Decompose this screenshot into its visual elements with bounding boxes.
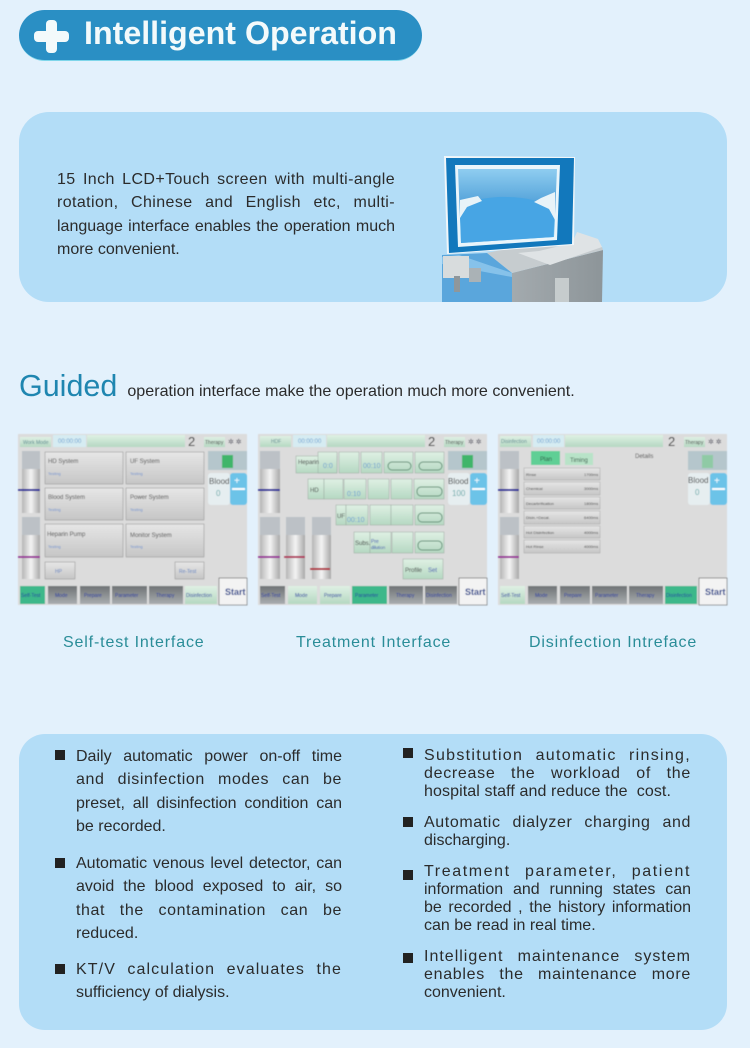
- feature: venous level detector: reduced.: [76, 925, 138, 942]
- screenshot: disinfection interface: [497, 434, 728, 606]
- screenshot: self-test interface: Therapy: [205, 440, 224, 446]
- screenshot: disinfection interface: Blood: [688, 476, 708, 485]
- feature: KT/V: [55, 961, 342, 1001]
- screenshot: treatment interface: 00:10: [347, 517, 365, 524]
- screenshot: treatment interface: Start: [465, 587, 486, 597]
- screenshot: treatment interface: Prepare: [324, 593, 342, 599]
- screenshot: treatment interface: HD: [310, 488, 319, 494]
- screenshot: self-test interface: Heparin Pump: [47, 532, 86, 538]
- feature: maintenance: convenient.: [424, 984, 506, 1001]
- feature: venous level detector: that the contamination can be: [76, 902, 342, 919]
- screenshot: disinfection interface: 4000ms: [584, 544, 598, 549]
- screenshot: disinfection interface: Decarbrification: [526, 501, 554, 506]
- feature: KT/V: KT/V calculation evaluates the: [76, 961, 342, 978]
- feature: treatment records: [403, 863, 691, 934]
- screenshot: disinfection interface: Start: [705, 587, 726, 597]
- screenshot: disinfection interface: Prepare: [564, 593, 582, 599]
- screenshot: self-test interface: Start: [225, 587, 246, 597]
- screenshot: self-test interface: ✲ ✲: [228, 438, 242, 446]
- screenshot: disinfection interface: 1800ms: [584, 501, 598, 506]
- feature: treatment records: Treatment parameter, patient: [424, 863, 691, 880]
- icon: dialysis machine with monitor: [442, 156, 603, 302]
- feature: maintenance: enables the maintenance more: [424, 966, 691, 983]
- feature: dialyzer charging: discharging.: [424, 832, 510, 849]
- feature: power on-off: [55, 748, 342, 835]
- screenshot: treatment interface: 00:00:00: [298, 439, 322, 445]
- text block: screen description: language interface enables the operation much: [57, 218, 395, 235]
- screenshot: self-test interface: [17, 434, 248, 606]
- feature: venous level detector: Automatic venous level detector, can: [76, 855, 342, 872]
- screenshot: disinfection interface: 6400ms: [584, 515, 598, 520]
- feature: treatment records: information and running states can: [424, 881, 691, 898]
- screenshot: disinfection interface: 2: [668, 434, 675, 449]
- feature: treatment records: can be read in real time.: [424, 917, 596, 934]
- screenshot: treatment interface: Self-Test: [261, 593, 281, 599]
- tray: [518, 232, 602, 265]
- screenshot: treatment interface: Mode: [295, 593, 308, 599]
- screenshot: treatment interface: Profile: [405, 568, 423, 574]
- screenshot: treatment interface: 0:0: [323, 463, 333, 470]
- feature: power on-off: Daily automatic power on-off time: [76, 748, 342, 765]
- grey body: [512, 250, 603, 302]
- screenshot: self-test interface: Power System: [130, 495, 169, 501]
- blue front: [442, 253, 512, 302]
- screenshot: self-test interface: Parameter: [115, 593, 139, 599]
- screenshot: disinfection interface: Parameter: [595, 593, 619, 599]
- caption: treatment: Treatment Interface: [296, 634, 451, 651]
- screenshot: treatment interface: 0:10: [347, 491, 361, 498]
- screenshot: self-test interface: Testing: [48, 507, 61, 512]
- screenshot: self-test interface: Testing: [130, 471, 143, 476]
- text block: screen description: more convenient.: [57, 241, 180, 258]
- feature: power on-off: preset, all disinfection condition can: [76, 795, 342, 812]
- screenshot: self-test interface: Prepare: [84, 593, 102, 599]
- heading: guided: Guided operation interface make the operation much more convenient.: [19, 369, 575, 403]
- title text: Intelligent Operation: [84, 15, 397, 51]
- screenshot: self-test interface: Testing: [48, 544, 61, 549]
- screenshot: treatment interface: Therapy: [396, 593, 415, 599]
- screenshot: treatment interface: 2: [428, 434, 435, 449]
- panel: LCD touch screen: [19, 112, 727, 302]
- text block: screen description: [57, 171, 395, 258]
- text block: screen description: 15 Inch LCD+Touch screen with multi-angle: [57, 171, 395, 188]
- screenshot: disinfection interface: Mode: [535, 593, 548, 599]
- screenshot: disinfection interface: 4000ms: [584, 530, 598, 535]
- screenshot: disinfection interface: Details: [635, 454, 653, 460]
- screenshot: disinfection interface: Disin.+Decal.: [526, 515, 550, 520]
- screenshot: disinfection interface: Timing: [570, 458, 588, 464]
- screenshot: self-test interface: UF System: [130, 459, 160, 465]
- icon: plus: [34, 20, 69, 53]
- screenshot: treatment interface: [257, 434, 488, 606]
- feature: dialyzer charging: Automatic dialyzer charging and: [424, 814, 691, 831]
- screenshot: disinfection interface: Disinfection: [666, 593, 692, 599]
- screenshot: disinfection interface: Rinse: [526, 472, 537, 477]
- screenshot: treatment interface: Heparin: [298, 460, 319, 466]
- screenshot: treatment interface: 00:10: [363, 463, 381, 470]
- screenshot: disinfection interface: Therapy: [636, 593, 655, 599]
- screenshot: treatment interface: ✲ ✲: [468, 438, 482, 446]
- screenshot: self-test interface: Testing: [48, 471, 61, 476]
- screenshot: self-test interface: HP: [55, 569, 63, 575]
- screenshot: treatment interface: UF: [337, 514, 345, 520]
- feature: venous level detector: [55, 855, 342, 942]
- screenshot: self-test interface: 00:00:00: [58, 439, 82, 445]
- screenshot: self-test interface: 0: [216, 489, 221, 498]
- screenshot: self-test interface: Self-Test: [21, 593, 41, 599]
- screenshot: disinfection interface: Hot Rinse: [526, 544, 544, 549]
- screenshot: treatment interface: HDF: [271, 439, 281, 445]
- caption: disinfection: Disinfection Intreface: [529, 634, 697, 651]
- title banner: [19, 10, 422, 61]
- feature: power on-off: be recorded.: [76, 818, 166, 835]
- screenshot: self-test interface: Work Mode: [23, 440, 49, 446]
- screenshot: self-test interface: Monitor System: [130, 533, 172, 539]
- screenshot: self-test interface: +: [234, 476, 240, 487]
- screenshot: disinfection interface: 3000ms: [584, 486, 598, 491]
- text block: screen description: rotation, Chinese and English etc, multi-: [57, 194, 395, 211]
- screenshot: treatment interface: Parameter: [355, 593, 379, 599]
- feature: power on-off: and disinfection modes can be: [76, 771, 342, 788]
- screenshot: treatment interface: Pre: [371, 539, 379, 545]
- feature: venous level detector: avoid the blood exposed to air, so: [76, 878, 342, 895]
- panel: features: [19, 734, 727, 1030]
- screenshot: disinfection interface: Hot Disinfection: [526, 530, 554, 535]
- screenshot: disinfection interface: Self-Test: [501, 593, 521, 599]
- screenshot: disinfection interface: ✲ ✲: [708, 438, 722, 446]
- feature: dialyzer charging: [403, 814, 691, 849]
- screenshot: disinfection interface: Therapy: [685, 440, 704, 446]
- screenshot: self-test interface: HD System: [48, 459, 78, 465]
- feature: substitution rinsing: [403, 747, 691, 800]
- screenshot: disinfection interface: Disinfection: [501, 439, 527, 445]
- screenshot: self-test interface: 2: [188, 434, 195, 449]
- screenshot: disinfection interface: +: [714, 476, 720, 487]
- screenshot: self-test interface: Blood: [209, 477, 229, 486]
- screenshot: treatment interface: Therapy: [445, 440, 464, 446]
- screenshot: self-test interface: Re-Test: [179, 569, 197, 575]
- feature: treatment records: be recorded , the history information: [424, 899, 691, 916]
- feature: maintenance: Intelligent maintenance system: [424, 948, 691, 965]
- screenshot: disinfection interface: Chemical: [526, 486, 543, 491]
- feature: substitution rinsing: decrease the workload of the: [424, 765, 691, 782]
- screenshot: self-test interface: Blood System: [48, 495, 85, 501]
- screenshot: disinfection interface: Plan: [540, 457, 552, 463]
- screenshot: self-test interface: Disinfection: [186, 593, 212, 599]
- screenshot: self-test interface: Mode: [55, 593, 68, 599]
- screenshot: self-test interface: Testing: [130, 544, 143, 549]
- caption: self-test: Self-test Interface: [63, 634, 205, 651]
- screenshot: treatment interface: dilution: [371, 545, 386, 550]
- feature: substitution rinsing: hospital staff and reduce the cost.: [424, 783, 671, 800]
- screenshot: treatment interface: Blood: [448, 477, 468, 486]
- screenshot: disinfection interface: 1700ms: [584, 472, 598, 477]
- screenshot: treatment interface: Set: [428, 568, 437, 574]
- feature: substitution rinsing: Substitution automatic rinsing,: [424, 747, 691, 764]
- screenshot: treatment interface: Subs.: [355, 541, 371, 547]
- feature: KT/V: sufficiency of dialysis.: [76, 984, 230, 1001]
- screenshot: self-test interface: Testing: [130, 507, 143, 512]
- screenshot: disinfection interface: 00:00:00: [537, 439, 561, 445]
- monitor: [444, 156, 575, 254]
- screenshot: self-test interface: Therapy: [156, 593, 175, 599]
- feature: maintenance: [403, 948, 691, 1001]
- screenshot: treatment interface: +: [474, 476, 480, 487]
- screenshot: disinfection interface: 0: [695, 488, 700, 497]
- screenshot: treatment interface: Disinfection: [426, 593, 452, 599]
- screenshot: treatment interface: 100: [452, 489, 466, 498]
